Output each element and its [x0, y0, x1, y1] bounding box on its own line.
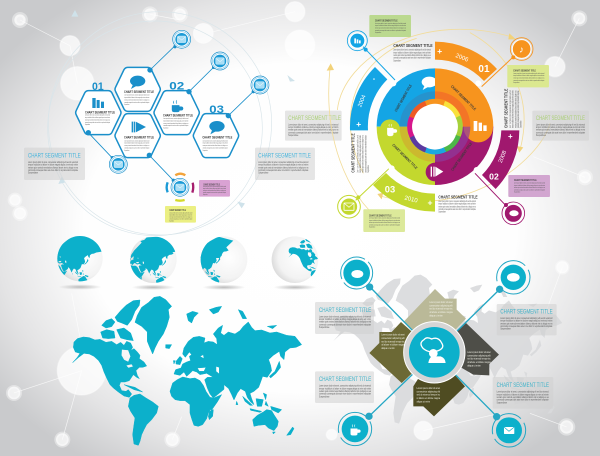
text panel: center green: CHART SEGMENT TITLE	[288, 115, 341, 122]
icon node: cup	[338, 412, 373, 446]
text panel: center	[255, 148, 315, 180]
callout: top green	[369, 15, 411, 37]
hexagon 4: CHART SEGMENT TITLE	[124, 136, 154, 140]
segment: blue: +	[356, 119, 361, 129]
globes row	[57, 236, 318, 290]
step numbers: 01	[92, 81, 104, 93]
text panel: top left	[315, 302, 374, 334]
diamond: right	[435, 323, 499, 375]
text panel: bottom left: CHART SEGMENT TITLE	[319, 376, 372, 383]
segment: purple: 02	[489, 171, 499, 181]
hexagon 4	[115, 114, 160, 158]
icon node: chat top left	[341, 257, 373, 291]
hexagon 1: CHART SEGMENT TITLE	[85, 110, 115, 114]
globe 3	[200, 236, 247, 290]
text block: top: CHART SEGMENT TITLE	[393, 43, 433, 48]
hexagon 5: CHART SEGMENT TITLE	[202, 136, 233, 140]
puzzle bumps	[380, 113, 493, 181]
callout: purple	[199, 180, 230, 197]
text panel: green	[532, 111, 589, 141]
step numbers	[92, 80, 224, 116]
callout: purple	[508, 175, 550, 197]
inner shaded ring	[403, 95, 467, 158]
hexagon 3	[154, 91, 199, 135]
text block: left vertical: CHART SEGMENT TITLE	[351, 133, 356, 173]
wedge titles: CHART SEGMENT TITLE	[450, 85, 477, 112]
diamond: bottom	[413, 352, 465, 416]
hexagon 2	[115, 67, 160, 111]
decorative orbit circles	[48, 10, 295, 236]
text block: top	[393, 43, 433, 62]
icon nodes	[338, 31, 533, 225]
diamond: left	[369, 322, 435, 383]
step numbers: 03	[209, 104, 224, 116]
yellow orbit arrows	[327, 29, 550, 228]
text block: bottom: CHART SEGMENT TITLE	[438, 194, 478, 199]
segment: lime: 03	[385, 185, 395, 195]
panel: hexagon process chart	[24, 10, 342, 236]
hexagon 2: CHART SEGMENT TITLE	[124, 90, 154, 94]
world map	[73, 296, 302, 445]
text panel: left: CHART SEGMENT TITLE	[28, 153, 81, 160]
text panel: top right: CHART SEGMENT TITLE	[500, 309, 553, 316]
text panel: top right	[497, 304, 557, 335]
wedge titles: CHART SEGMENT TITLE	[450, 141, 473, 172]
wedge titles: CHART SEGMENT TITLE	[394, 84, 413, 112]
segment: lime: +	[427, 198, 433, 208]
wedge notches	[389, 80, 481, 173]
callout: lime: CHART SEGMENT TITLE	[513, 68, 536, 72]
leader lines	[369, 287, 500, 416]
wedge titles: CHART SEGMENT TITLE	[391, 143, 418, 170]
connector lines	[88, 39, 260, 187]
connector dots	[86, 45, 255, 182]
text block: right vertical	[503, 89, 523, 128]
callout: bottom lime: CHART SEGMENT TITLE	[369, 213, 392, 217]
icon node: chat top right	[496, 261, 530, 294]
callout: bottom lime	[363, 209, 405, 232]
text panel: center: CHART SEGMENT TITLE	[258, 153, 311, 160]
hexagon 5	[193, 114, 239, 158]
leader lines	[349, 41, 522, 213]
segment: lime: 2010	[404, 195, 419, 205]
callout: purple: CHART SEGMENT TITLE	[203, 182, 220, 186]
globe 4	[272, 236, 318, 290]
segment: blue	[350, 67, 437, 130]
text block: bottom	[438, 194, 478, 214]
icon nodes	[109, 30, 269, 173]
icon node: mail	[492, 413, 526, 447]
globe 1	[57, 236, 102, 290]
hexagon 3: CHART SEGMENT TITLE	[163, 113, 193, 117]
icon nodes: ♪	[519, 45, 524, 55]
wedge icons	[387, 121, 487, 177]
callout: top green: CHART SEGMENT TITLE	[375, 18, 398, 22]
text panel: bottom left	[315, 371, 374, 403]
globe 2	[130, 236, 176, 290]
grey world map backdrop	[333, 275, 562, 424]
text panel: center green	[285, 111, 342, 141]
wedge titles	[391, 84, 477, 172]
central colored node	[167, 174, 193, 201]
step numbers: 02	[169, 80, 184, 92]
text block: right vertical: CHART SEGMENT TITLE	[503, 89, 508, 128]
callout: yellow: CHART SEGMENT TITLE	[169, 208, 186, 212]
segment: lime	[373, 127, 435, 212]
diamond: top	[404, 289, 466, 351]
segment: blue: 2004	[357, 94, 368, 108]
segment: orange: 01	[478, 64, 490, 75]
panel: cloud support diagram	[315, 257, 562, 447]
callout: purple: CHART SEGMENT TITLE	[514, 178, 537, 182]
hexagon 1	[76, 91, 121, 135]
panel: circular segment chart	[327, 15, 589, 232]
text panel: bottom right: CHART SEGMENT TITLE	[497, 382, 549, 389]
callout: yellow	[165, 206, 196, 223]
segment: orange: +	[437, 46, 442, 56]
center hub	[408, 100, 462, 153]
segment: purple: +	[508, 132, 513, 141]
segment: orange: 2006	[454, 53, 470, 64]
callout: lime	[507, 65, 549, 87]
text panel: bottom right	[493, 377, 553, 409]
segment: blue: -	[373, 74, 376, 83]
text panel: left	[24, 148, 85, 180]
segment: orange	[435, 42, 497, 127]
center badge	[404, 322, 465, 383]
text block: left vertical	[351, 133, 370, 173]
segment: purple	[435, 127, 519, 189]
text panel: top left: CHART SEGMENT TITLE	[319, 307, 372, 314]
segment: purple: 2008	[498, 150, 508, 164]
